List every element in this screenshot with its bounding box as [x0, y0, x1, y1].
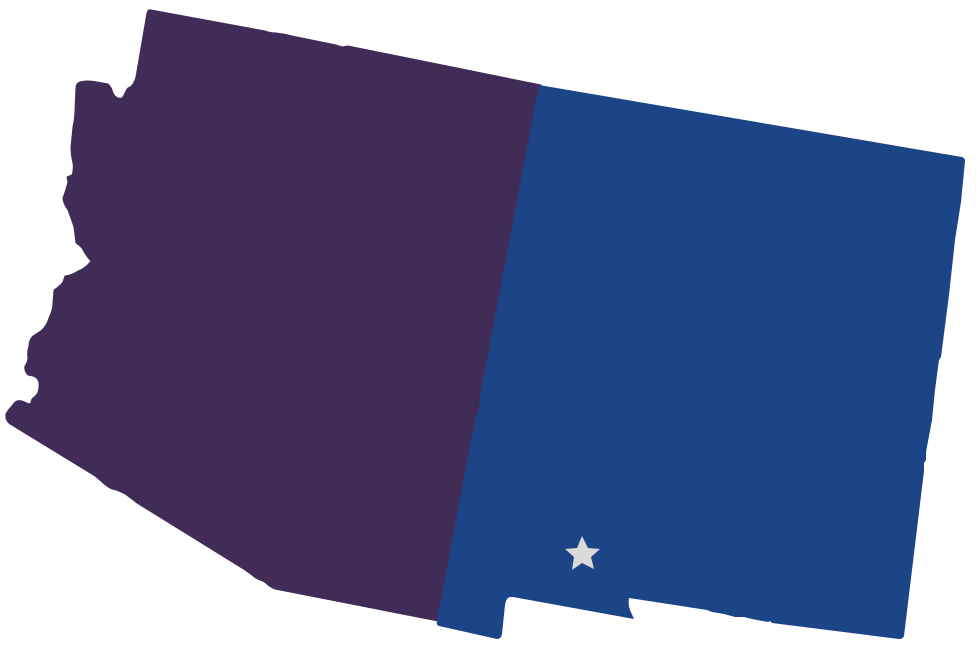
icon: star marking city [565, 536, 600, 570]
state: Arizona [6, 10, 541, 621]
state: New Mexico [437, 85, 965, 639]
